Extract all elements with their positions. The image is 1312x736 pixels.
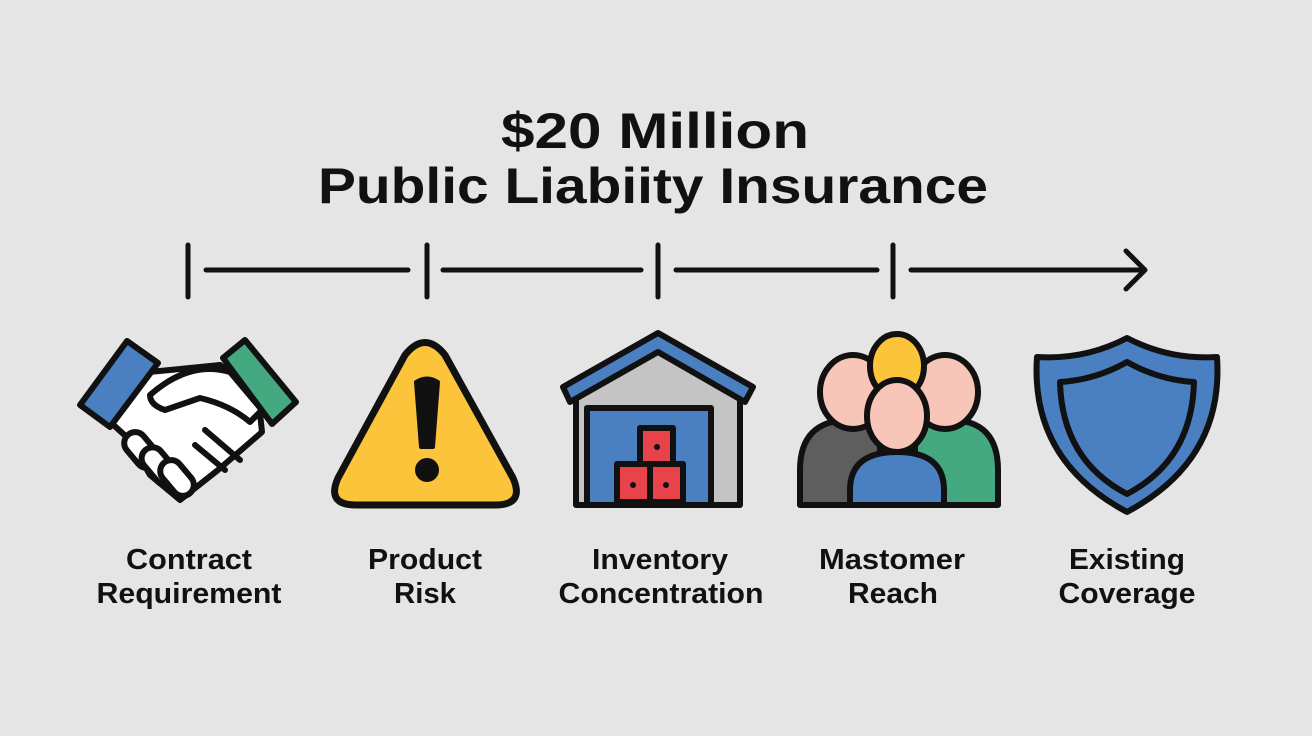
label: product risk: Risk	[394, 578, 457, 610]
icon: shield	[1037, 338, 1217, 512]
label: product risk: Product	[368, 544, 482, 576]
title: $20 Million	[501, 103, 809, 159]
label: contract requirement: Requirement	[96, 578, 282, 610]
timeline arrow	[188, 245, 1145, 297]
label: contract requirement	[96, 544, 282, 610]
label: mastomer reach: Reach	[848, 578, 938, 610]
label: inventory concentration: Concentration	[558, 578, 764, 610]
icon: warning triangle	[335, 342, 516, 505]
label: mastomer reach	[819, 544, 965, 610]
title: Public Liabiity Insurance	[318, 158, 988, 214]
label: existing coverage: Coverage	[1058, 578, 1196, 610]
icon: handshake	[80, 340, 296, 500]
label: existing coverage	[1058, 544, 1196, 610]
label: contract requirement: Contract	[126, 544, 252, 576]
label: mastomer reach: Mastomer	[819, 544, 965, 576]
icon: warehouse	[563, 333, 753, 505]
label: inventory concentration	[558, 544, 764, 610]
icon: customers group	[800, 334, 998, 505]
title	[318, 103, 988, 214]
label: product risk	[368, 544, 482, 610]
label: existing coverage: Existing	[1069, 544, 1185, 576]
label: inventory concentration: Inventory	[592, 544, 728, 576]
